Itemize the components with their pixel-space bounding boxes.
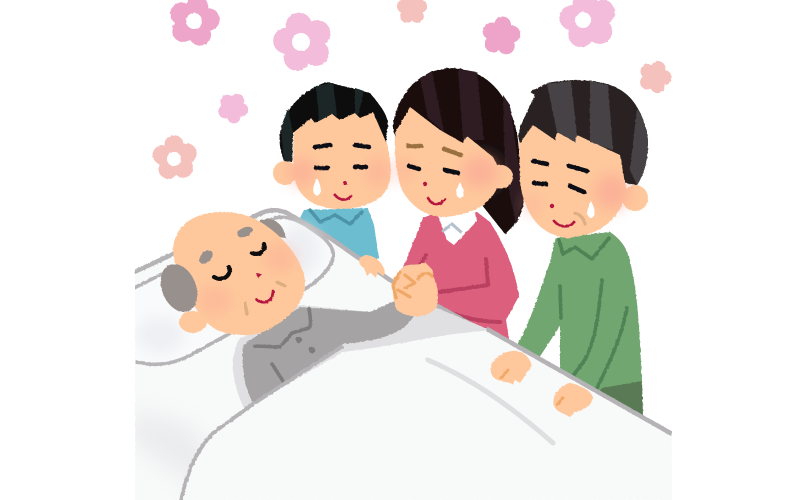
mattress bbox=[134, 208, 672, 432]
flower 6 bbox=[635, 56, 676, 96]
bed edge bbox=[487, 329, 672, 434]
flower 7 bbox=[213, 87, 254, 127]
man: collar and fold lines bbox=[559, 238, 627, 397]
grandfather: collar and fold lines bbox=[255, 309, 310, 381]
flower 2 bbox=[268, 6, 338, 75]
child: shirt bbox=[298, 208, 379, 270]
man: sweater bbox=[514, 232, 642, 398]
child: tear, nose and mouth bbox=[313, 178, 321, 196]
grandfather: back hair bbox=[258, 219, 286, 238]
blanket: crease bbox=[428, 360, 553, 443]
soft shadow lower left bbox=[137, 420, 200, 476]
grandfather: ear bbox=[179, 311, 207, 333]
grandfather: eyebrows bbox=[236, 225, 254, 239]
child: eyebrows and eyes bbox=[315, 145, 369, 168]
family and bed figure group bbox=[130, 68, 672, 500]
pillow bbox=[130, 217, 333, 364]
woman: tear, nose and mouth bbox=[456, 182, 464, 198]
flower 3 bbox=[397, 0, 427, 23]
man: left hand bbox=[491, 351, 532, 384]
woman: face bbox=[395, 107, 513, 217]
child: collar bbox=[310, 210, 362, 224]
man: eyebrows and eyes bbox=[533, 161, 587, 192]
bed bbox=[130, 210, 672, 500]
flower 4 bbox=[480, 14, 523, 56]
grandfather: head bbox=[173, 212, 305, 335]
man: ear and face bbox=[519, 110, 648, 238]
grandfather: wrinkles bbox=[245, 282, 285, 314]
blanket bbox=[180, 329, 672, 500]
illustration: family at grandfather's bedside bbox=[134, 0, 672, 500]
flower 8 bbox=[151, 134, 198, 180]
woman: sweater fold lines bbox=[418, 255, 500, 322]
joined hands bbox=[393, 262, 438, 316]
woman: eyebrows and eyes bbox=[408, 146, 461, 155]
child: hand on bed bbox=[359, 255, 385, 278]
grandfather: pajama top bbox=[242, 300, 414, 403]
man: pants bbox=[600, 380, 643, 416]
grandfather: nose and mouth bbox=[256, 273, 262, 278]
child: hair bbox=[280, 82, 388, 162]
flower 1 bbox=[165, 0, 224, 49]
grandfather bbox=[154, 212, 490, 412]
man: tear, wrinkle, nose and mouth bbox=[575, 213, 585, 224]
flower 5 bbox=[555, 0, 620, 50]
man: right hand bbox=[553, 383, 593, 417]
man: hair bbox=[518, 80, 648, 185]
child: ear and face bbox=[273, 104, 391, 209]
grandfather: side hair bbox=[154, 258, 204, 318]
woman: shirt collar bbox=[437, 210, 477, 245]
woman: long hair bbox=[393, 68, 524, 234]
woman: sweater bbox=[395, 210, 519, 345]
flowers bbox=[151, 0, 676, 180]
grandfather: closed eyes bbox=[214, 244, 264, 279]
body shadow bbox=[233, 305, 490, 412]
